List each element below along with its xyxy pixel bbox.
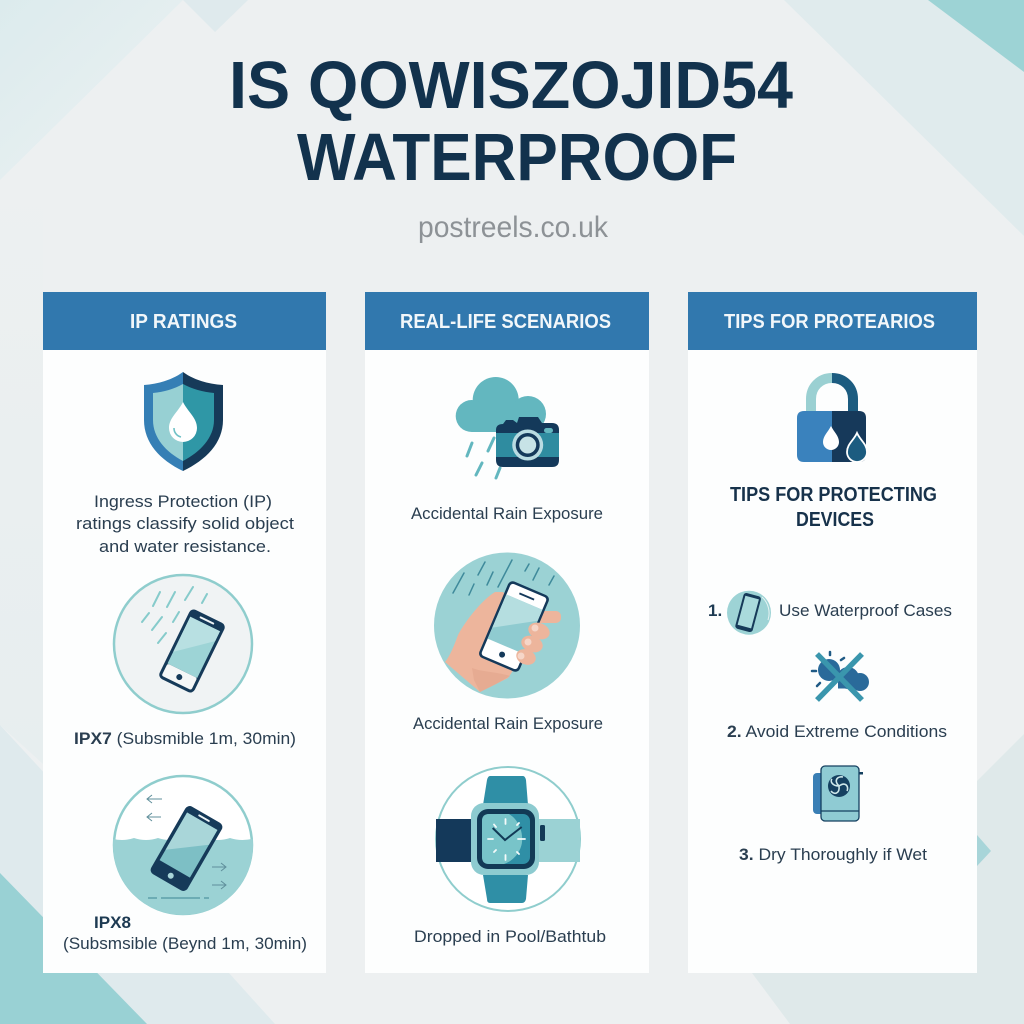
tip 1: use waterproof cases <box>708 591 952 635</box>
panel: real-life scenarios <box>365 292 649 973</box>
tip 1: use waterproof cases: Use Waterproof Cases <box>779 601 952 620</box>
panel heading: IP ratings <box>43 292 326 350</box>
panel heading: real-life scenarios <box>365 292 649 350</box>
icon: padlock with drops <box>797 378 867 462</box>
label: IPX7: IPX7 (Subsmible 1m, 30min) <box>74 729 296 748</box>
icon: IPX7 phone in rain <box>114 575 252 713</box>
tip 1: use waterproof cases: 1. <box>708 601 722 620</box>
text: IP description: ratings classify solid object <box>76 514 294 533</box>
label: dropped in pool: Dropped in Pool/Bathtub <box>414 927 606 946</box>
panel heading: IP ratings: IP RATINGS <box>130 311 237 333</box>
tip 3: dry thoroughly: 3. Dry Thoroughly if Wet <box>739 845 927 864</box>
subtitle: postreels.co.uk <box>418 211 609 244</box>
title: WATERPROOF <box>297 120 737 195</box>
icon: shield with water drop <box>144 372 223 471</box>
icon: hand holding phone in rain <box>434 552 580 698</box>
heading: tips for protecting devices: DEVICES <box>796 509 874 531</box>
icon: cloud and camera in rain <box>456 377 559 478</box>
label: rain exposure: Accidental Rain Exposure <box>411 504 603 523</box>
panel heading: tips: TIPS FOR PROTEARIOS <box>724 311 935 333</box>
title <box>229 48 793 195</box>
panel: IP ratings <box>43 292 326 973</box>
title: IS QOWISZOJID54 <box>229 48 793 123</box>
tip 2: avoid extreme conditions: 2. Avoid Extreme Conditions <box>727 722 947 741</box>
panel: tips for protecting devices <box>688 292 977 973</box>
label: IPX8: (Subsmsible (Beynd 1m, 30min) <box>63 934 307 953</box>
icon: smartwatch <box>436 767 580 911</box>
panel heading: tips <box>688 292 977 350</box>
icon: sun and cloud crossed out <box>812 652 869 700</box>
text: IP description: and water resistance. <box>99 537 271 556</box>
panel heading: real-life scenarios: REAL-LIFE SCENARIOS <box>400 311 611 333</box>
icon: drying device with fan <box>813 766 863 821</box>
text: IP description: Ingress Protection (IP) <box>94 492 272 511</box>
icon: IPX8 submerged phone <box>110 776 256 920</box>
heading: tips for protecting devices: TIPS FOR PROTECTING <box>730 484 937 506</box>
label: IPX8: IPX8 <box>94 913 131 932</box>
label: rain exposure second: Accidental Rain Exposure <box>413 714 603 733</box>
text: IP description <box>76 492 294 556</box>
label: IPX8 <box>63 913 307 953</box>
heading: tips for protecting devices <box>730 484 937 531</box>
